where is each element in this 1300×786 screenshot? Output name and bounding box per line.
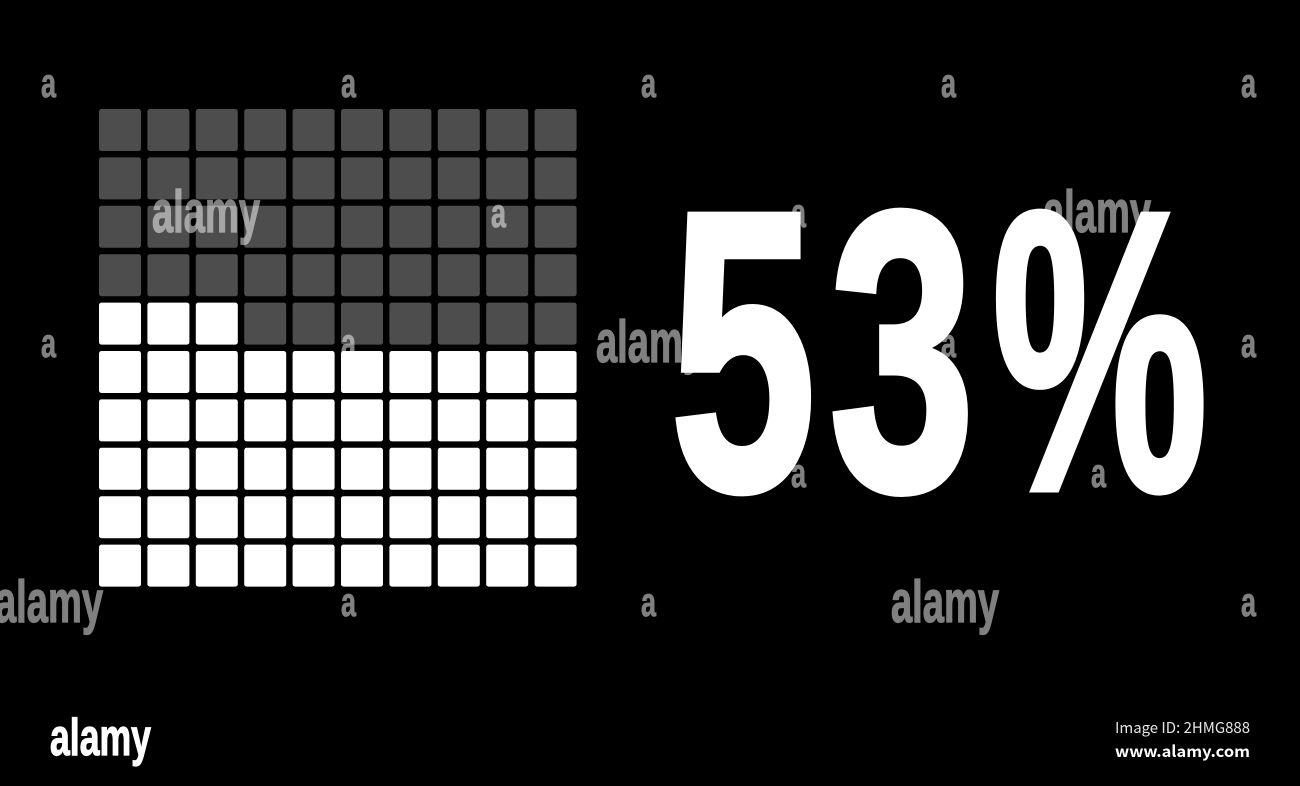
filled squares: 53 white [99,303,577,587]
watermark pattern: a [41,60,57,106]
watermark pattern: a [641,60,657,106]
unfilled squares: 47 grey [99,109,577,345]
watermark pattern: a [341,320,357,366]
image ID: Image ID: 2HMG888 [1115,717,1250,738]
watermark pattern: alamy [1043,179,1151,245]
watermark pattern: a [941,60,957,106]
watermark pattern: a [41,320,57,366]
watermark pattern: a [791,190,807,236]
watermark pattern: alamy [891,569,999,635]
waffle chart: 53 of 100 squares filled [99,109,577,587]
watermark pattern: a [1091,450,1107,496]
headline number: 53%: % [992,129,1208,574]
headline number: 53%: 3 [829,130,975,574]
watermark pattern: alamy [152,179,260,245]
watermark pattern: a [341,60,357,106]
headline number: 53% [670,129,1208,574]
watermark pattern [0,60,1257,635]
watermark pattern: a [491,190,507,236]
watermark pattern: a [1241,60,1257,106]
website URL: www.alamy.com [1115,740,1250,762]
watermark pattern: a [641,579,657,625]
watermark pattern: a [1241,320,1257,366]
headline number: 53%: 5 [670,130,816,574]
logo: alamy: alamy [50,709,151,767]
watermark pattern: a [341,579,357,625]
watermark pattern: alamy [0,569,103,635]
watermark pattern: alamy [596,309,704,375]
watermark pattern: a [791,450,807,496]
watermark pattern: a [491,450,507,496]
watermark pattern: a [1241,579,1257,625]
watermark pattern: a [941,320,957,366]
